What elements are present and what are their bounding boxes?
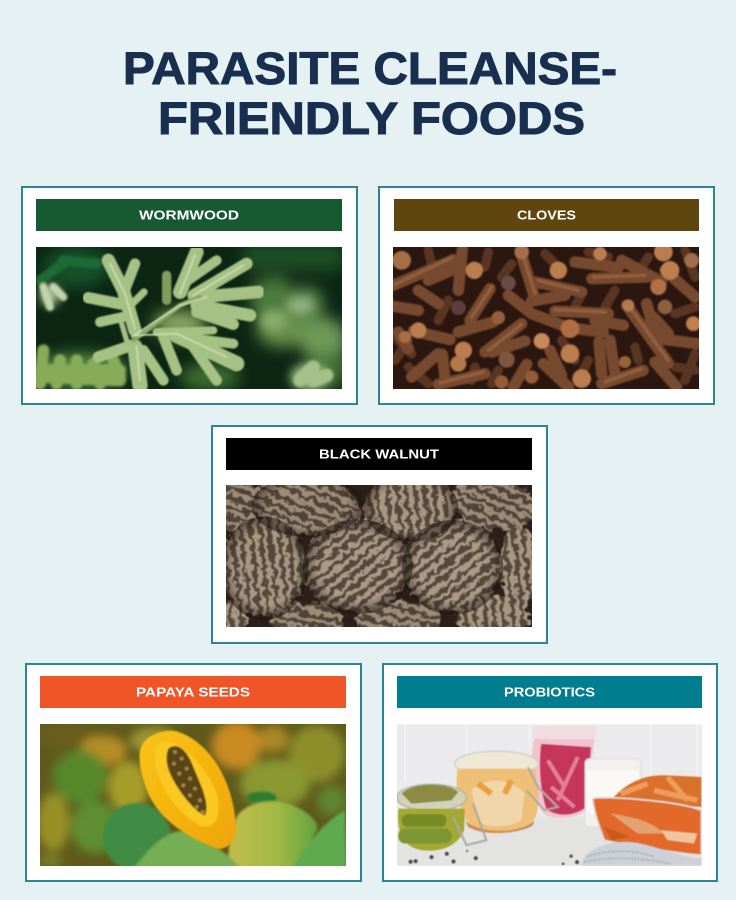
heading: wormwood (36, 199, 342, 231)
icon: orange jar (455, 751, 558, 833)
heading: black walnut: BLACK WALNUT (319, 446, 439, 462)
heading: probiotics (397, 676, 702, 708)
panel: probiotics (383, 664, 717, 881)
title (123, 43, 617, 144)
heading: cloves (394, 199, 699, 231)
title: PARASITE CLEANSE- (123, 43, 617, 94)
panel: wormwood (22, 187, 357, 404)
icon: pickle jar (397, 784, 486, 851)
photo: cloves (393, 247, 699, 389)
heading: black walnut (226, 438, 532, 470)
peppercorns (409, 850, 579, 865)
heading: cloves: CLOVES (517, 208, 576, 222)
heading: wormwood: WORMWOOD (139, 208, 239, 222)
panel: cloves (379, 187, 714, 404)
icon: cut papaya half (140, 731, 236, 849)
panel: papaya seeds (26, 664, 361, 881)
icon: kimchi dish (593, 775, 701, 855)
photo: fermented foods (397, 724, 702, 866)
title: FRIENDLY FOODS (158, 93, 585, 144)
heading: papaya seeds: PAPAYA SEEDS (136, 684, 250, 700)
icon: milk glass (585, 759, 641, 827)
icon: folded cloth (581, 842, 701, 866)
photo: papaya (40, 724, 346, 866)
panel: black walnut (207, 426, 547, 643)
heading: papaya seeds (40, 676, 346, 708)
photo: black walnuts (226, 485, 532, 627)
icon: pink jar (532, 726, 596, 818)
heading: probiotics: PROBIOTICS (504, 684, 595, 700)
photo: wormwood leaf (36, 247, 342, 389)
